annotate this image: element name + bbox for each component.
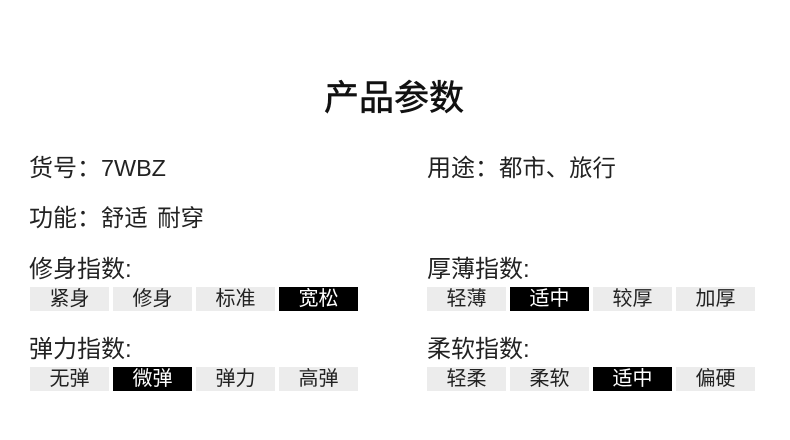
scale: fit index: 标准: [216, 288, 256, 310]
scale: thickness index: 适中: [530, 288, 570, 310]
text: item number: 货号：7WBZ: [29, 155, 166, 182]
text: function: 功能：舒适 耐穿: [29, 205, 204, 232]
scale: fit index: 宽松: [298, 288, 338, 310]
scale: softness index: 偏硬: [696, 368, 736, 390]
scale: thickness index: 加厚: [696, 288, 736, 310]
scale: elasticity index: 无弹: [50, 368, 90, 390]
scale: softness index: 轻柔: [446, 368, 486, 390]
heading: softness index: 柔软指数:: [427, 336, 530, 363]
heading: thickness index: 厚薄指数:: [427, 256, 530, 283]
heading: elasticity index: 弹力指数:: [29, 336, 132, 363]
scale: softness index: [427, 367, 755, 391]
scale: fit index: 紧身: [50, 288, 90, 310]
scale: thickness index: [427, 287, 755, 311]
scale: elasticity index: [30, 367, 358, 391]
scale: thickness index: 较厚: [612, 288, 652, 310]
heading: fit index: 修身指数:: [29, 256, 132, 283]
scale: thickness index: 轻薄: [446, 288, 486, 310]
scale: elasticity index: 高弹: [298, 368, 338, 390]
scale: softness index: 柔软: [530, 368, 570, 390]
scale: fit index: 修身: [132, 288, 172, 310]
title: 产品参数: [324, 79, 464, 118]
scale: softness index: 适中: [612, 368, 652, 390]
scale: elasticity index: 微弹: [132, 368, 172, 390]
scale: fit index: [30, 287, 358, 311]
scale: elasticity index: 弹力: [216, 368, 256, 390]
text: usage: 用途：都市、旅行: [427, 155, 616, 182]
